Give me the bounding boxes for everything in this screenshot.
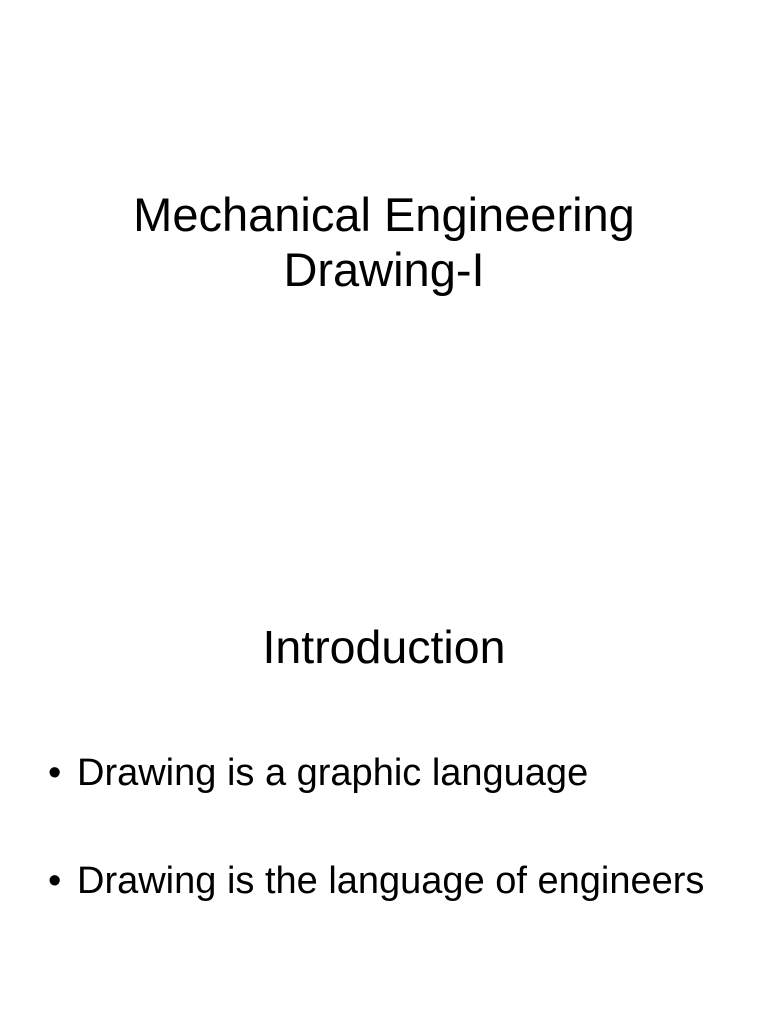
title: [133, 188, 635, 296]
bullet: graphic language: •: [48, 752, 61, 794]
bullet: language of engineers: Drawing is the language of engineers: [77, 860, 704, 902]
title: Drawing-I: [283, 243, 485, 296]
bullet: language of engineers: •: [48, 860, 61, 902]
title: Mechanical Engineering: [133, 188, 635, 241]
bullet: graphic language: Drawing is a graphic language: [77, 752, 588, 794]
heading: introduction: Introduction: [262, 621, 506, 673]
